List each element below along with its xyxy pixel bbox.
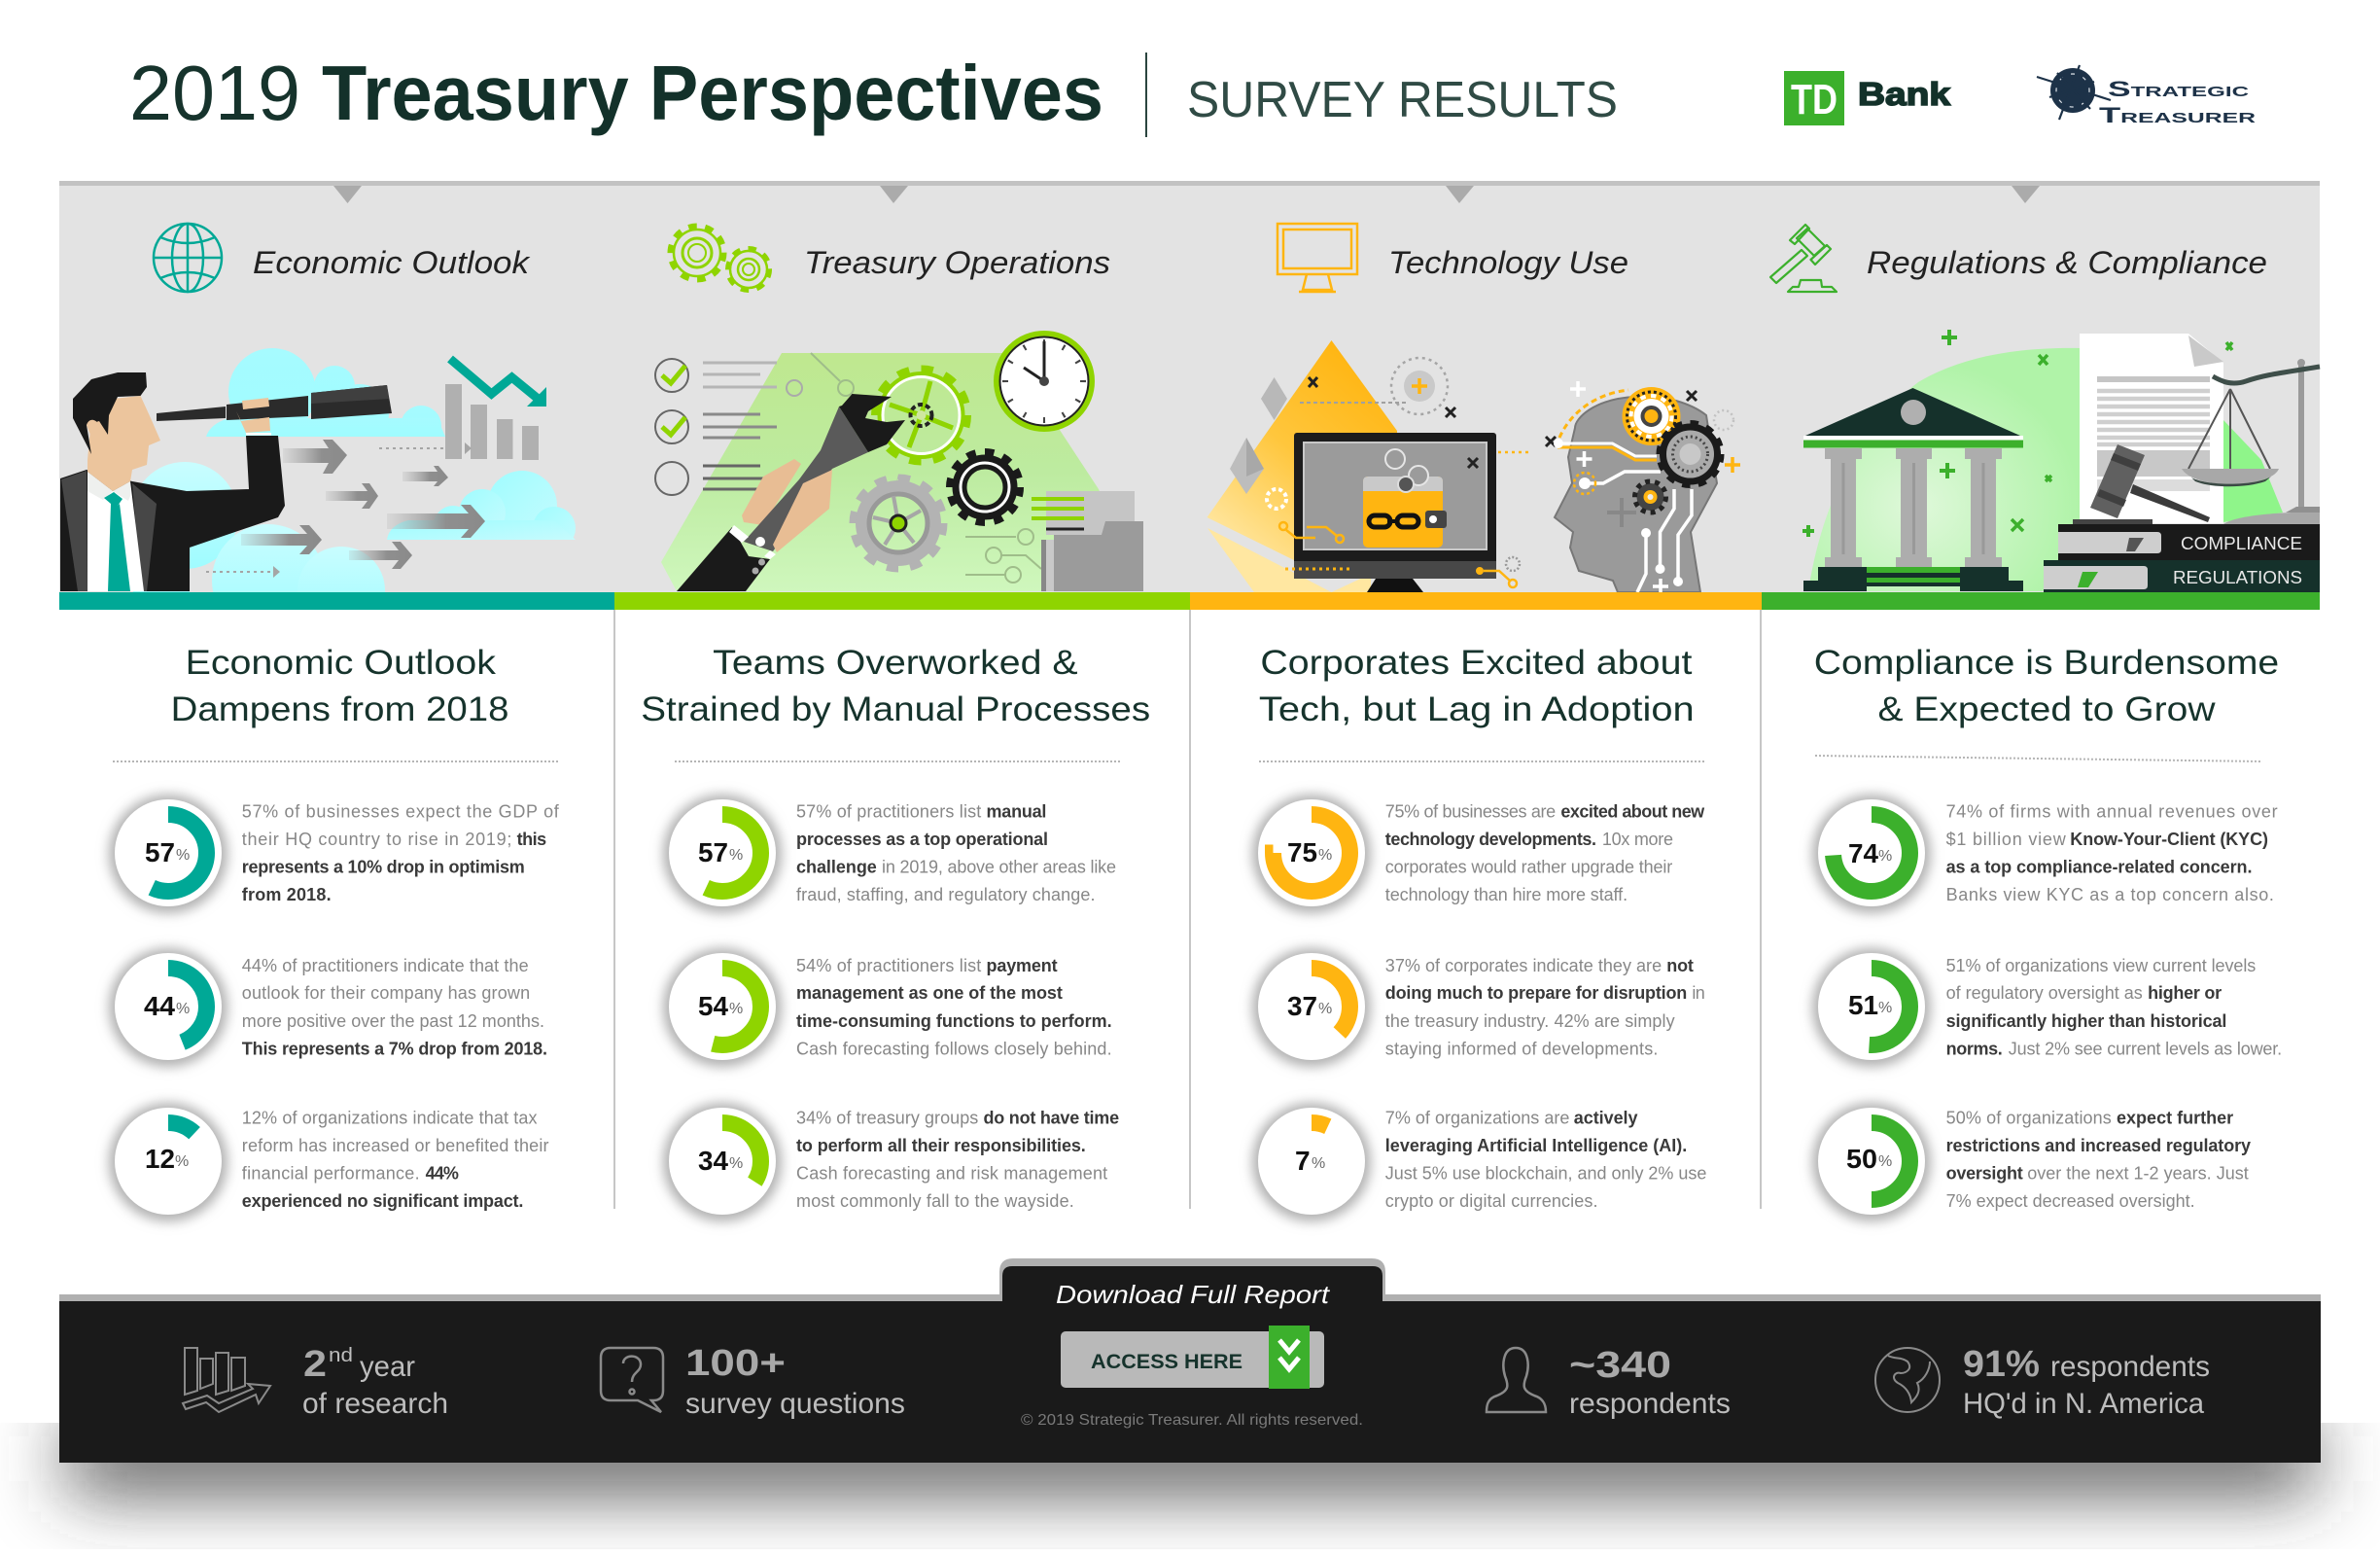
text: 34% treasury groups: 34% of treasury groups — [796, 1109, 978, 1128]
heading — [641, 644, 1150, 728]
stat: 75%: 75 — [1287, 837, 1317, 867]
text: 44% practitioners: 44% of practitioners indicate that the — [242, 956, 529, 975]
icon: gavel — [1770, 225, 1837, 292]
text: 57% businesses: 57% of businesses expect the GDP of — [242, 801, 560, 821]
text: 7% organizations: 7% of organizations are — [1385, 1109, 1569, 1128]
heading — [1814, 644, 2279, 728]
stat: 100+ survey questions: survey questions — [685, 1388, 905, 1420]
stat: 91% respondents: HQ'd in N. America — [1963, 1388, 2204, 1420]
stat: 50%: % — [1878, 1153, 1892, 1170]
text: 57% practitioners: in 2019, above other areas like — [882, 858, 1116, 877]
text: 57% businesses: their HQ country to rise in 2019; — [242, 830, 511, 849]
text: 75% businesses: excited about new — [1560, 801, 1705, 821]
logo: Strategic Treasurer: Strategic — [2108, 77, 2249, 101]
text: 50% organizations: oversight — [1946, 1164, 2023, 1184]
text: 37% corporates — [1385, 956, 1705, 1058]
column: Economic Outlook — [109, 644, 560, 1221]
text: 75% businesses: technology than hire more staff. — [1385, 885, 1628, 904]
icon: gears — [671, 227, 769, 290]
text: 7% organizations — [1385, 1109, 1706, 1211]
label: regulations book: REGULATIONS — [2173, 568, 2302, 587]
logo: TD Bank: Bank — [1858, 76, 1951, 112]
text: 50% organizations: over the next 1-2 years. Just — [2027, 1164, 2249, 1184]
stat: 44%: % — [176, 1001, 190, 1017]
stat: 2nd year of research: of research — [302, 1388, 448, 1420]
stat: 37%: % — [1318, 1001, 1332, 1017]
stat: 75% — [1252, 795, 1371, 913]
panel: illustrated banner — [59, 181, 2320, 637]
stat: 57%: % — [176, 847, 190, 864]
stat: 91% respondents: 91% — [1963, 1344, 2040, 1385]
heading: & Expected to Grow — [1878, 690, 2216, 728]
text: 57% practitioners: processes as a top operational — [796, 830, 1048, 849]
stat: 75%: % — [1318, 847, 1332, 864]
stat: ~340 respondents: respondents — [1569, 1388, 1731, 1420]
text: 37% corporates: doing much to prepare for disruption — [1385, 983, 1687, 1003]
text: 12% organizations: 12% of organizations indicate that tax — [242, 1109, 538, 1128]
stat: 7%: % — [1312, 1155, 1325, 1172]
stat: ~340 respondents: ~340 — [1569, 1345, 1671, 1386]
stat: 12%: % — [175, 1153, 189, 1170]
button: access here: ACCESS HERE — [1091, 1351, 1242, 1373]
text: 57% practitioners: 57% of practitioners list — [796, 801, 981, 821]
heading: Compliance is Burdensome — [1814, 644, 2279, 682]
text: 7% organizations: crypto or digital currencies. — [1385, 1191, 1598, 1211]
stat: 54%: 54 — [698, 991, 728, 1021]
text: 12% organizations: reform has increased or benefited their — [242, 1136, 549, 1155]
label: compliance book: COMPLIANCE — [2181, 534, 2302, 553]
heading — [171, 644, 508, 728]
stat: 74%: 74 — [1848, 838, 1878, 868]
text: 51% organizations: Just 2% see current levels as lower. — [2009, 1039, 2282, 1058]
text: 51% organizations: significantly higher than historical — [1946, 1011, 2226, 1031]
text: 57% practitioners — [796, 801, 1116, 904]
column: Regulations & Compliance — [1812, 644, 2282, 1221]
text: 12% organizations: experienced no significant impact. — [242, 1191, 523, 1211]
section: Regulations & Compliance — [1770, 225, 2320, 592]
icon: globe — [154, 224, 222, 292]
text: 57% practitioners: challenge — [796, 858, 877, 877]
section: Economic Outlook — [60, 222, 576, 592]
stat: 12%: 12 — [145, 1144, 175, 1174]
text: 57% businesses: this — [517, 830, 546, 849]
copyright: © 2019 Strategic Treasurer. All rights reserved. — [1021, 1412, 1363, 1429]
text: 51% organizations: higher or — [2148, 983, 2222, 1003]
stat: 7% — [1252, 1103, 1371, 1221]
text: 75% businesses: technology developments. — [1385, 830, 1596, 849]
text: 37% corporates: staying informed of developments. — [1385, 1039, 1658, 1058]
logo: TD Bank — [1784, 71, 1951, 125]
text: 37% corporates: not — [1666, 956, 1694, 975]
subtitle: SURVEY RESULTS — [1187, 72, 1618, 128]
stat: 44%: 44 — [144, 991, 175, 1021]
stat: 54%: % — [729, 1001, 743, 1017]
text: 54% practitioners: 54% of practitioners list — [796, 956, 981, 975]
text: 34% treasury groups — [796, 1109, 1119, 1211]
text: 57% businesses: represents a 10% drop in optimism — [242, 858, 525, 877]
stat: 37%: 37 — [1287, 991, 1317, 1021]
icon: monitor — [1278, 224, 1357, 292]
text: 54% practitioners: time-consuming functions to perform. — [796, 1011, 1112, 1031]
text: 74% firms — [1946, 801, 2278, 904]
heading: Corporates Excited about — [1260, 644, 1693, 682]
text: 51% organizations: norms. — [1946, 1039, 2003, 1058]
heading: Strained by Manual Processes — [641, 690, 1150, 728]
text: 74% firms: Know-Your-Client (KYC) — [2070, 830, 2268, 849]
text: 54% practitioners: Cash forecasting follows closely behind. — [796, 1039, 1112, 1058]
heading: Tech, but Lag in Adoption — [1259, 690, 1695, 728]
text: 74% firms: 74% of firms with annual revenues over — [1946, 801, 2278, 821]
text: 34% treasury groups: Cash forecasting and risk management — [796, 1164, 1107, 1184]
heading: Teams Overworked & — [713, 644, 1078, 682]
text: 50% organizations: 50% of organizations — [1946, 1109, 2112, 1128]
text: 37% corporates: the treasury industry. 42% are simply — [1385, 1011, 1675, 1031]
column: Treasury Operations — [641, 644, 1150, 1221]
text: 57% practitioners: manual — [986, 801, 1046, 821]
text: 34% treasury groups: do not have time — [984, 1109, 1119, 1128]
text: 57% businesses — [242, 801, 560, 904]
text: 51% organizations — [1946, 956, 2282, 1058]
drop shadow under page — [68, 1430, 2314, 1488]
logo: Strategic Treasurer: Treasurer — [2099, 103, 2256, 127]
text: 51% organizations: of regulatory oversight as — [1946, 983, 2143, 1003]
text: 57% businesses: from 2018. — [242, 885, 332, 904]
stat: 74%: % — [1878, 848, 1892, 865]
text: 44% practitioners — [242, 956, 547, 1058]
stat: 50%: 50 — [1846, 1144, 1877, 1174]
stat: ~340 respondents — [1487, 1345, 1731, 1420]
illustration: businessman with telescope — [60, 348, 576, 592]
heading — [1259, 644, 1695, 728]
text: 7% organizations: Just 5% use blockchain, and only 2% use — [1385, 1164, 1706, 1184]
text: 74% firms: as a top compliance-related concern. — [1946, 858, 2252, 877]
text: 54% practitioners: management as one of the most — [796, 983, 1063, 1003]
stat: 57% — [663, 795, 782, 913]
stat: 91% respondents — [1875, 1344, 2210, 1420]
text: 50% organizations — [1946, 1109, 2251, 1211]
stat: 34% — [663, 1103, 782, 1221]
text: 12% organizations: financial performance. — [242, 1164, 420, 1184]
stat: 51% — [1812, 948, 1931, 1067]
stat: 54% — [663, 948, 782, 1067]
text: 50% organizations: expect further — [2117, 1109, 2233, 1128]
text: 12% organizations: 44% — [426, 1164, 459, 1184]
text: 51% organizations: 51% of organizations view current levels — [1946, 956, 2256, 975]
stat: 44% — [109, 948, 228, 1067]
text: 75% businesses: corporates would rather upgrade their — [1385, 858, 1672, 877]
section: Technology Use — [1208, 224, 1740, 592]
text: 50% organizations: restrictions and increased regulatory — [1946, 1136, 2251, 1155]
text: 74% firms: $1 billion view — [1946, 830, 2067, 849]
stat: 100+ survey questions: 100+ — [685, 1343, 786, 1384]
text: 7% organizations: actively — [1574, 1109, 1637, 1128]
stat: 57% — [109, 795, 228, 913]
text: 34% treasury groups: to perform all their responsibilities. — [796, 1136, 1086, 1155]
stat: 57%: 57 — [698, 837, 728, 867]
text: 34% treasury groups: most commonly fall to the wayside. — [796, 1191, 1074, 1211]
column: Technology Use — [1252, 644, 1706, 1221]
text: 12% organizations — [242, 1109, 549, 1211]
text: 54% practitioners: payment — [986, 956, 1058, 975]
section: Treasury Operations — [655, 227, 1143, 591]
stat: 12% — [109, 1103, 228, 1221]
stat: 50% — [1812, 1103, 1931, 1221]
heading: Regulations & Compliance: Regulations & Compliance — [1867, 245, 2267, 280]
stat: 2nd year of research: year — [360, 1351, 415, 1383]
illustration: bank, law books and scales — [1802, 330, 2320, 592]
title: Treasury Perspectives — [322, 50, 1103, 136]
text: 50% organizations: 7% expect decreased oversight. — [1946, 1191, 2195, 1211]
text: 57% practitioners: fraud, staffing, and regulatory change. — [796, 885, 1095, 904]
text: 75% businesses: 10x more — [1602, 830, 1673, 849]
stat: 51%: % — [1878, 1000, 1892, 1016]
illustration: monitor, wallet and AI head — [1208, 340, 1740, 592]
colour band — [59, 592, 2320, 610]
logo: TD Bank: TD — [1791, 76, 1838, 124]
stat: 34%: % — [729, 1155, 743, 1172]
footer bar — [59, 1258, 2321, 1463]
stat: 37% — [1252, 948, 1371, 1067]
text: 54% practitioners — [796, 956, 1112, 1058]
text: 75% businesses: 75% of businesses are — [1385, 801, 1556, 821]
button: access here — [1061, 1326, 1324, 1389]
stat: 74% — [1812, 795, 1931, 913]
stat: 100+ survey questions — [601, 1343, 905, 1420]
stat: 57%: 57 — [145, 837, 175, 867]
text: 75% businesses — [1385, 801, 1705, 904]
heading: Economic Outlook — [186, 644, 497, 682]
download heading: Download Full Report — [1056, 1280, 1331, 1309]
logo: Strategic Treasurer — [2037, 65, 2256, 127]
markers: section pointers — [333, 186, 2040, 203]
text: 37% corporates: 37% of corporates indicate they are — [1385, 956, 1662, 975]
stat: 34%: 34 — [698, 1146, 728, 1176]
text: 44% practitioners: outlook for their company has grown — [242, 983, 530, 1003]
heading: Treasury Operations: Treasury Operations — [804, 245, 1110, 280]
stat: 57%: % — [729, 847, 743, 864]
stat: 51%: 51 — [1848, 990, 1878, 1020]
stat: 2nd year of research — [183, 1344, 448, 1420]
text: 37% corporates: in — [1692, 983, 1705, 1003]
stat: 91% respondents: respondents — [2050, 1351, 2210, 1383]
stat: 7%: 7 — [1295, 1146, 1311, 1176]
text: 74% firms: Banks view KYC as a top concern also. — [1946, 885, 2274, 904]
text: 44% practitioners: more positive over the past 12 months. — [242, 1011, 544, 1031]
text: 7% organizations: leveraging Artificial Intelligence (AI). — [1385, 1136, 1687, 1155]
stat: 2nd year of research: nd — [329, 1345, 353, 1366]
heading: Technology Use: Technology Use — [1388, 245, 1628, 280]
illustration: wrench, gears, clock and checklist — [655, 334, 1143, 591]
heading: Dampens from 2018 — [171, 690, 508, 728]
text: 44% practitioners: This represents a 7% drop from 2018. — [242, 1039, 547, 1058]
title: 2019 — [129, 50, 300, 136]
stat: 2nd year of research: 2 — [303, 1344, 327, 1385]
heading: Economic Outlook: Economic Outlook — [253, 245, 531, 280]
